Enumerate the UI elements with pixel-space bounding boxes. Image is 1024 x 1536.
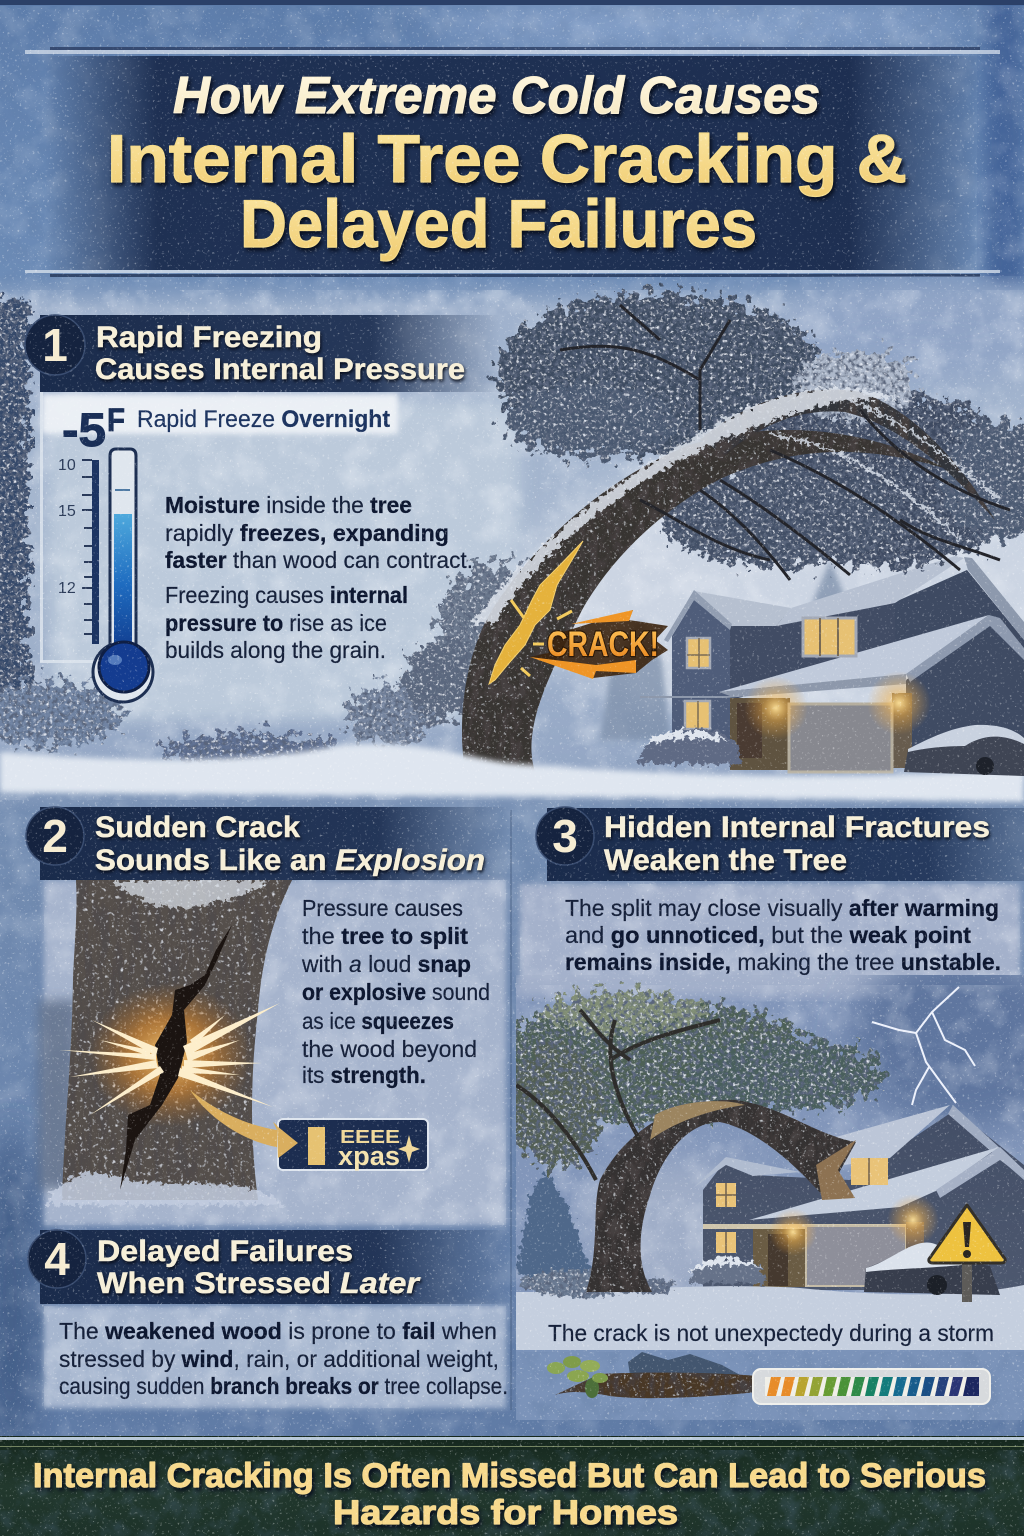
walls: [703, 1110, 1024, 1290]
section 1 header: [25, 315, 500, 392]
storm scene: [480, 950, 1024, 1425]
branch network: [560, 305, 1010, 580]
tree canopy back: [438, 293, 1024, 687]
golden crack in trunk: [489, 541, 583, 684]
footer banner: [0, 1436, 1024, 1536]
title banner: [25, 47, 1000, 277]
snowy ground: [0, 744, 1024, 802]
section 4 body text: causing sudden branch breaks or tree collapse.: [59, 1373, 508, 1399]
lights: [769, 1208, 817, 1256]
number badge: 2: [42, 810, 68, 862]
lower gable wall: [906, 622, 1024, 765]
explosion sparks: [60, 1003, 280, 1115]
snow on limb: [470, 388, 900, 625]
callout: CRACK! burst: CRACK!: [547, 625, 659, 664]
thermometer: F: [107, 402, 125, 438]
upper right gable wall: [895, 570, 1024, 665]
number badge: 4: [44, 1233, 70, 1285]
garage pillar: [892, 693, 912, 768]
windows: [716, 1158, 888, 1253]
snow bushes left: [0, 640, 476, 766]
arrow to badge: [190, 1090, 298, 1158]
number badge: 1: [42, 319, 68, 371]
warning sign: [929, 1205, 1005, 1302]
footer line 2: Hazards for Homes: [333, 1494, 678, 1532]
heading lines: [95, 321, 465, 386]
badge: EEEE: [340, 1127, 400, 1147]
title line 3: Delayed Failures: [240, 186, 757, 262]
panel: section 4 delayed failures: [28, 1230, 510, 1408]
badge: xpas: [338, 1141, 400, 1171]
section 3 body text: and go unnoticed, but the weak point: [565, 922, 971, 948]
fallen branch icon: [547, 1352, 756, 1398]
house 2: [693, 1105, 1024, 1290]
heading lines: Sudden Crack: [95, 811, 300, 844]
garage: [806, 1226, 906, 1286]
left gable: [693, 1157, 800, 1188]
section 3 body text: [565, 895, 1001, 975]
section 2 body text: with a loud snap: [301, 951, 471, 977]
section 1 body text: builds along the grain.: [165, 637, 386, 663]
upper limb: [700, 390, 995, 520]
heading lines: [95, 811, 485, 877]
section 1 body text: Freezing causes internal: [165, 582, 408, 608]
panel: section 3 hidden fractures: [480, 807, 1024, 1425]
section 4 body text: stressed by wind, rain, or additional weight,: [59, 1346, 499, 1372]
heading lines: [97, 1235, 422, 1300]
porch lights: [744, 676, 808, 740]
section 1 body text: pressure to rise as ice: [165, 610, 387, 636]
number badge: [536, 807, 594, 865]
lightning: [872, 987, 975, 1105]
curved tree trunk: [462, 305, 1010, 772]
main gable trim: [964, 557, 1024, 640]
left upper window: [687, 638, 710, 668]
footer line 1: Internal Cracking Is Often Missed But Can Lead to Serious: [33, 1457, 986, 1495]
section 2 body text: or explosive sound: [302, 979, 490, 1005]
split crack: [120, 925, 232, 1190]
section 1 body text: [165, 492, 473, 663]
section 3 header: [536, 807, 1024, 881]
middle wall: [730, 600, 895, 700]
number badge: [25, 315, 85, 375]
upper roof: [776, 556, 964, 626]
lower roof: [749, 1147, 999, 1220]
panel: section 1 winter scene: [0, 276, 1024, 816]
house: [640, 556, 1024, 772]
lower roof: [719, 615, 989, 692]
badge: [277, 1119, 428, 1171]
upper roof: [800, 1105, 950, 1172]
section 2 body text: the tree to split: [302, 923, 468, 949]
section 2 body text: [301, 895, 490, 1088]
storm caption: The crack is not unexpectedy during a storm: [548, 1320, 994, 1346]
section 4 header: [28, 1230, 510, 1304]
misty background: [0, 276, 1024, 816]
callout: CRACK! burst: [511, 600, 668, 679]
panel: section 2 sudden crack: [26, 807, 512, 1410]
heading lines: Rapid Freezing: [96, 321, 322, 354]
thermometer: -5: [62, 403, 106, 456]
heading lines: Delayed Failures: [97, 1235, 353, 1268]
ground: [516, 1285, 1024, 1420]
glow: [88, 983, 252, 1127]
number badge: [26, 807, 84, 865]
section 2 body text: the wood beyond: [302, 1036, 477, 1062]
heading lines: Weaken the Tree: [604, 844, 847, 877]
title line 1: How Extreme Cold Causes: [173, 67, 820, 125]
snow covered car: [904, 725, 1024, 776]
section 3 body text: remains inside, making the tree unstable.: [565, 949, 1001, 975]
thermometer: 15: [58, 503, 76, 520]
left wing roof: [694, 591, 791, 626]
door: [737, 703, 762, 758]
heading lines: [604, 811, 990, 877]
section 3 body text: The split may close visually after warming: [565, 895, 999, 921]
rapid freeze label: Rapid Freeze Overnight: [137, 406, 390, 433]
distant trees: [600, 560, 848, 740]
section 1 body text: faster than wood can contract.: [165, 547, 473, 573]
garage door: [789, 704, 892, 772]
section 1 body text: rapidly freezes, expanding: [165, 520, 449, 546]
panel: section 1 text card: [25, 315, 500, 702]
pine trees: [516, 1170, 1024, 1280]
heading lines: When Stressed Later: [97, 1267, 422, 1300]
section 2 body text: Pressure causes: [302, 895, 463, 921]
heading lines: Sounds Like an Explosion: [95, 844, 485, 877]
colour gauge: [753, 1369, 990, 1404]
section 2 body text: its strength.: [302, 1062, 426, 1088]
bush: [688, 1258, 768, 1284]
heading lines: Causes Internal Pressure: [95, 353, 465, 386]
section 4 body text: The weakened wood is prone to fail when: [59, 1318, 497, 1344]
snowy car: [864, 1242, 1000, 1295]
snowy base shrubs: [520, 1269, 675, 1297]
upper window: [803, 618, 856, 656]
section 4 body text: [59, 1318, 508, 1399]
left forest edge: [0, 300, 30, 700]
number badge: 3: [552, 810, 578, 862]
bush by house: [638, 729, 742, 764]
heading lines: Hidden Internal Fractures: [604, 811, 990, 844]
section 2 body text: as ice squeezes: [302, 1008, 454, 1034]
left gable wall: [672, 600, 730, 740]
thermometer: [58, 402, 153, 702]
thermometer: 12: [58, 580, 76, 597]
canopy: [480, 992, 885, 1167]
number badge: [28, 1230, 86, 1288]
tree trunk: [45, 880, 292, 1205]
tree trunk and bent limb: [516, 1010, 856, 1292]
section 2 header: [26, 807, 510, 880]
thermometer: 10: [58, 457, 76, 474]
section 1 body text: Moisture inside the tree: [165, 492, 412, 518]
porch: [730, 698, 790, 770]
left gable trim: [664, 590, 732, 642]
porch: [753, 1229, 805, 1287]
left lower window: [685, 701, 710, 729]
title line 2: Internal Tree Cracking &: [107, 121, 907, 197]
dark forest edge: [38, 1000, 78, 1190]
